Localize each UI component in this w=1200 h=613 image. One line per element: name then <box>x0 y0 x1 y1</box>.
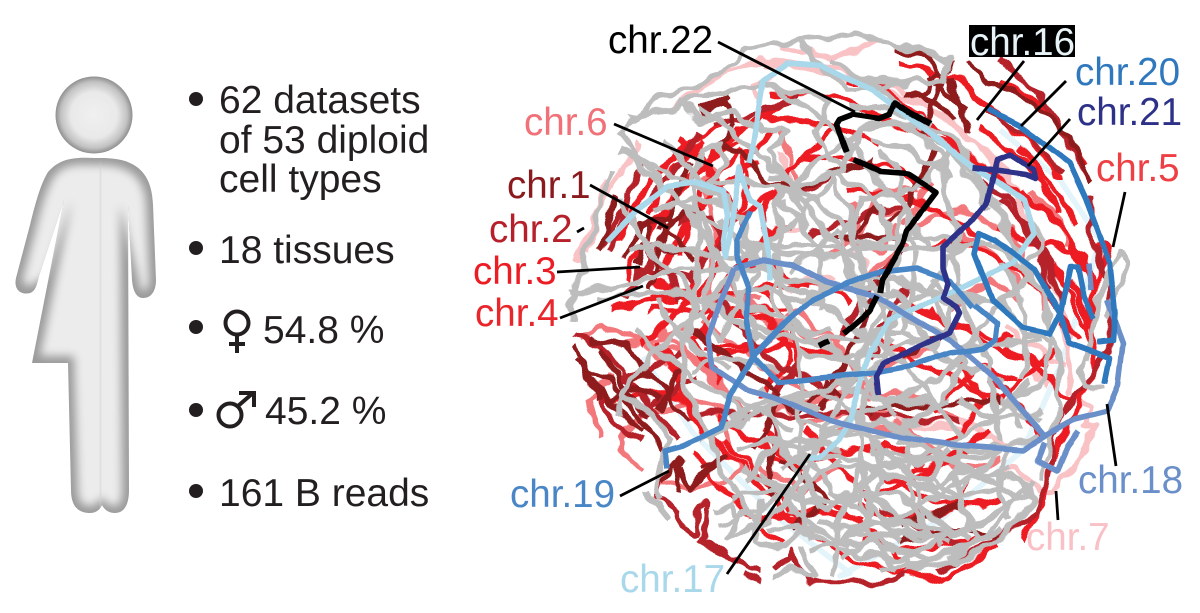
bullet: datasets: of 53 diploid <box>219 119 429 162</box>
label: chr.1: chr.1 <box>507 164 591 207</box>
chr.3 and chr.4 bright red strands <box>600 65 1108 580</box>
label: chr.16: chr.16 <box>970 21 1075 64</box>
bullet: datasets <box>189 79 429 201</box>
label: chr.6: chr.6 <box>524 101 608 144</box>
label: chr.18: chr.18 <box>1078 459 1183 502</box>
label: chr.4: chr.4 <box>475 292 559 335</box>
chr.19 strand <box>665 212 997 468</box>
label: chr.19: chr.19 <box>510 473 615 516</box>
bullet: female share <box>189 309 384 353</box>
icon: human figure with half-female half-male silhouette <box>16 76 156 513</box>
chr.20 strand <box>975 108 1115 383</box>
bullet: reads: 161 B reads <box>219 472 429 515</box>
bullet: datasets: 62 datasets <box>219 79 421 122</box>
bullet: datasets: cell types <box>219 158 382 201</box>
label: chr.7: chr.7 <box>1026 516 1110 559</box>
stats list <box>189 79 429 515</box>
figure body <box>16 158 156 513</box>
label: chr.21: chr.21 <box>1077 91 1182 134</box>
bullet: male share: 45.2 % <box>265 390 386 433</box>
label: chr.2: chr.2 <box>489 208 573 251</box>
leader lines <box>557 42 1125 574</box>
wobbled gray chromosome strands <box>570 35 1125 577</box>
chr.6 salmon strands <box>580 130 1068 490</box>
chr.1 dark red strands <box>575 48 1090 540</box>
label: chr.3: chr.3 <box>473 250 557 293</box>
chr.2 brick red strands <box>575 60 1110 583</box>
wobbled coloured chromosome strands <box>607 62 1123 470</box>
chr.21 strand <box>877 155 1035 395</box>
bullet: female share: 54.8 % <box>263 309 384 352</box>
chr.17 strand <box>607 62 1033 457</box>
wobbled red and pink strands <box>575 40 1110 583</box>
chr.22 strand <box>820 103 935 347</box>
label: chr.22: chr.22 <box>608 19 713 62</box>
bullet: tissues: 18 tissues <box>219 229 395 272</box>
faint chromosome strand <box>643 130 1100 576</box>
chr.7 pink strands <box>578 40 1098 492</box>
chart: chromosome polymer ball <box>570 35 1125 583</box>
label: chr.5: chr.5 <box>1096 147 1180 190</box>
bullet: male share <box>189 390 386 433</box>
figure head <box>56 76 132 154</box>
chr.18 strand <box>708 260 1123 470</box>
label: chr.20: chr.20 <box>1075 51 1180 94</box>
label: chr.17: chr.17 <box>620 558 725 601</box>
